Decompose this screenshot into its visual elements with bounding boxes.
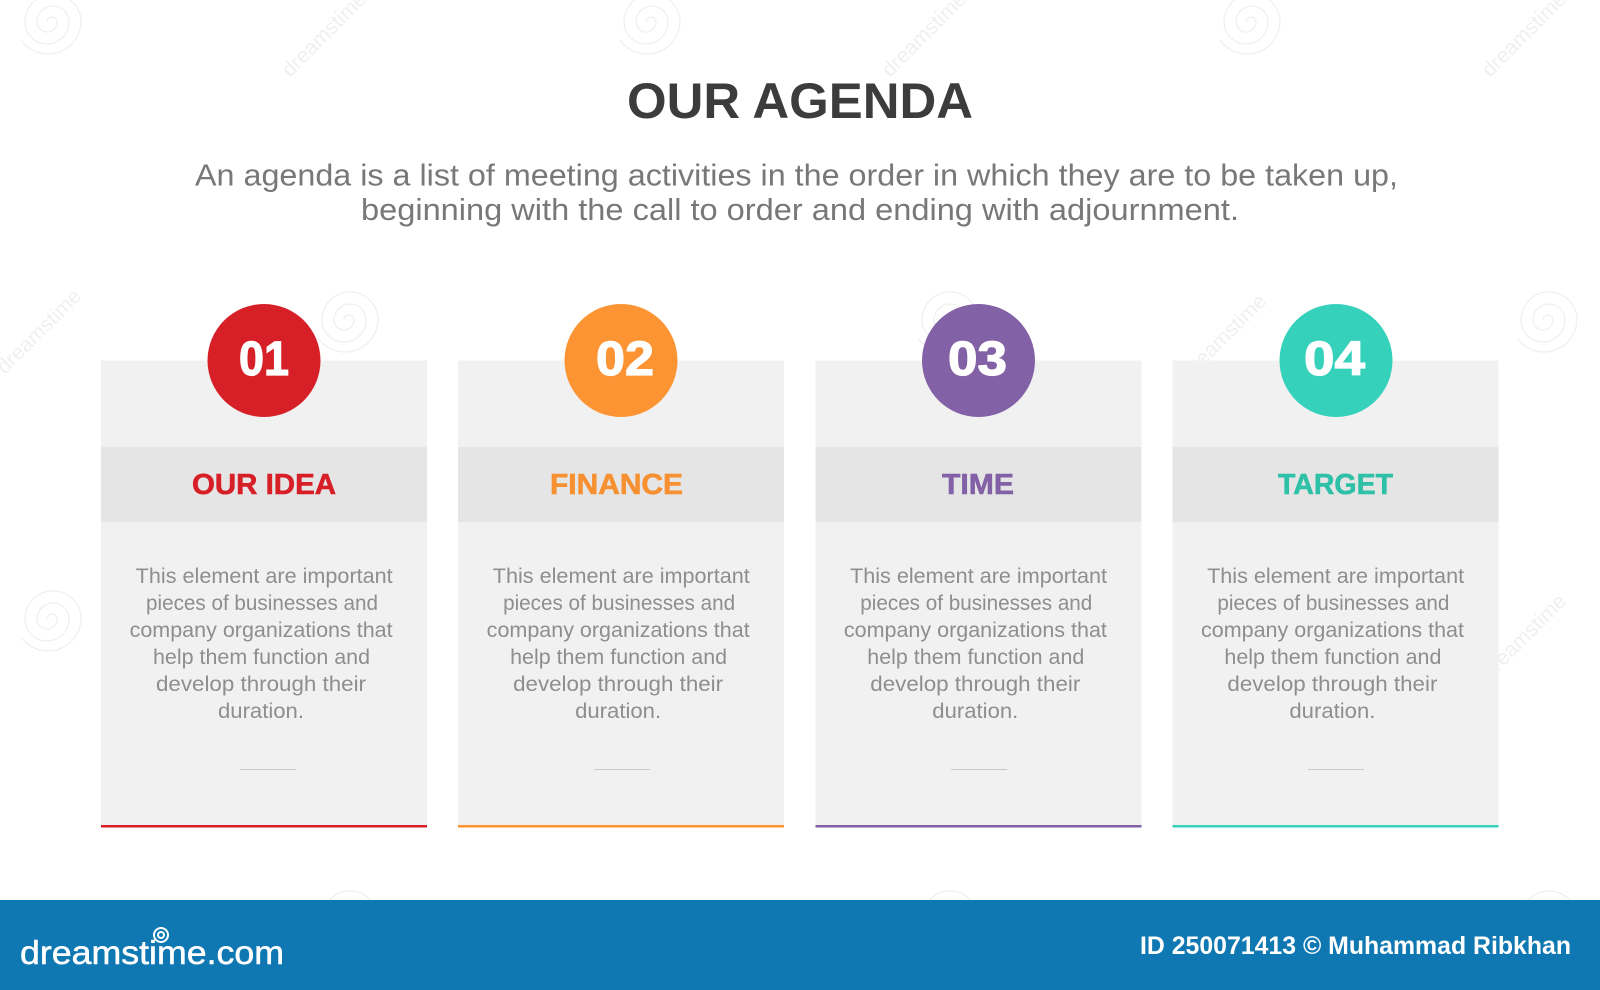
accent line — [1172, 825, 1498, 828]
body text — [130, 565, 393, 723]
background watermark: dreamstime — [1477, 590, 1571, 684]
subtitle — [195, 158, 1398, 227]
heading: target: TARGET — [1278, 469, 1393, 501]
body text: company organizations that — [130, 619, 393, 642]
body text: company organizations that — [487, 619, 750, 642]
body text: develop through their — [1227, 673, 1437, 696]
number 03: 03 — [948, 333, 1007, 386]
accent line — [458, 825, 784, 828]
background watermark: dreamstime — [1177, 290, 1271, 384]
footer credit: ID 250071413 © Muhammad Ribkhan — [1140, 932, 1571, 960]
accent line — [816, 825, 1142, 828]
body text: company organizations that — [1201, 619, 1464, 642]
number badge 04 — [1280, 304, 1392, 417]
body text: This element are important — [850, 565, 1107, 588]
heading: time: TIME — [942, 469, 1014, 501]
header band — [1172, 447, 1498, 522]
body text: duration. — [932, 700, 1018, 723]
heading: finance: FINANCE — [550, 469, 683, 501]
body text — [844, 565, 1107, 723]
body text: pieces of businesses and — [1217, 592, 1449, 615]
logo spiral — [154, 928, 168, 942]
number 04: 04 — [1304, 333, 1365, 386]
accent line — [101, 825, 427, 828]
body text: duration. — [575, 700, 661, 723]
number badge 02 — [564, 304, 678, 417]
body text — [487, 565, 750, 723]
header band — [458, 447, 784, 522]
header band — [101, 447, 427, 522]
body text: duration. — [218, 700, 304, 723]
body text: This element are important — [136, 565, 393, 588]
body text: help them function and — [867, 646, 1084, 669]
body text: help them function and — [153, 646, 370, 669]
body text: pieces of businesses and — [503, 592, 735, 615]
footer bar — [0, 900, 1600, 990]
panel: card 1 our idea — [101, 304, 427, 828]
body text: This element are important — [493, 565, 750, 588]
number badge 03 — [922, 304, 1035, 417]
body text: This element are important — [1207, 565, 1464, 588]
panel: card 4 target — [1172, 304, 1498, 828]
body text: help them function and — [1224, 646, 1441, 669]
number 02: 02 — [596, 333, 654, 386]
panel: card 2 finance — [458, 304, 784, 828]
body text: develop through their — [156, 673, 366, 696]
title: OUR AGENDA — [627, 73, 973, 129]
body text: help them function and — [510, 646, 727, 669]
body text: pieces of businesses and — [860, 592, 1092, 615]
panel: card 3 time — [816, 304, 1142, 828]
heading: our idea: OUR IDEA — [192, 469, 336, 501]
body text: duration. — [1289, 700, 1375, 723]
number badge 01 — [208, 304, 320, 417]
subtitle: beginning with the call to order and ending with adjournment. — [361, 192, 1239, 227]
body text: company organizations that — [844, 619, 1107, 642]
header band — [816, 447, 1142, 522]
body text — [1201, 565, 1464, 723]
footer logo: dreamstime.com — [20, 934, 284, 971]
subtitle: An agenda is a list of meeting activities in the order in which they are to be taken up, — [195, 158, 1398, 192]
body text: develop through their — [870, 673, 1080, 696]
body text: develop through their — [513, 673, 723, 696]
body text: pieces of businesses and — [146, 592, 378, 615]
number 01: 01 — [239, 333, 289, 386]
